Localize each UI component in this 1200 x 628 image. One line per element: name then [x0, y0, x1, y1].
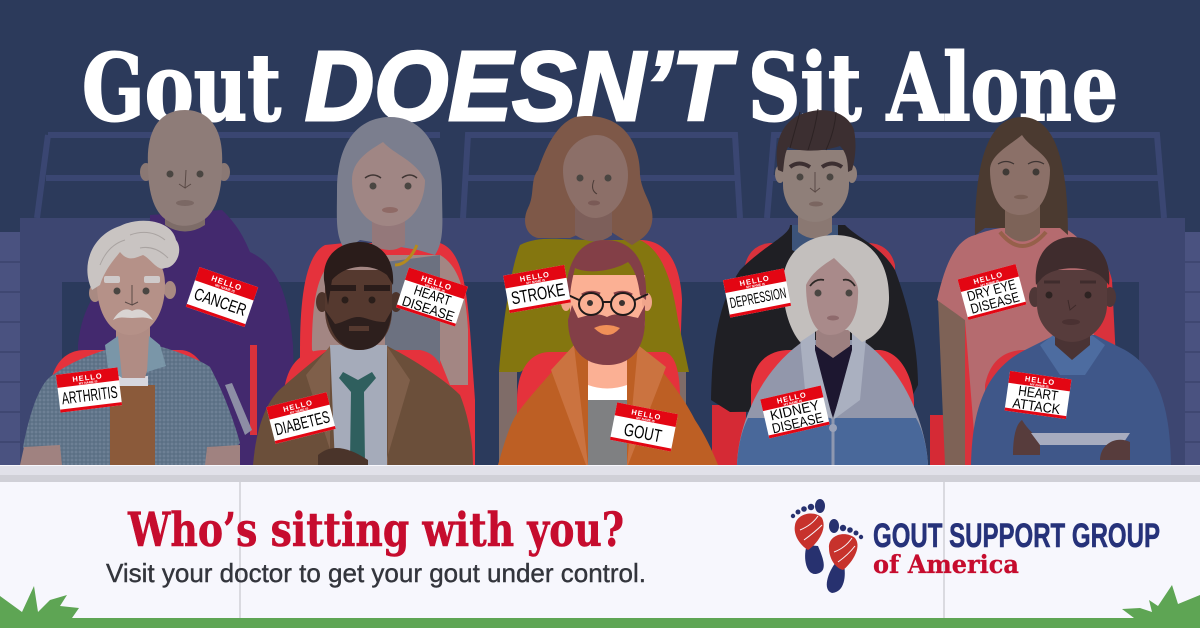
person: man in blue sweater holding paper	[971, 237, 1171, 465]
name tag: cancer	[186, 267, 258, 327]
name tag: diabetes: MY NAME IS	[290, 406, 309, 415]
name tag: stroke: MY NAME IS	[526, 278, 545, 285]
name tag: dry eye disease: DISEASE	[969, 288, 1021, 317]
callout heading: Who’s sitting with you?	[127, 503, 624, 558]
title: DOESN’T	[305, 31, 737, 141]
name tag: depression: DEPRESSION	[728, 285, 788, 312]
person: bald man in purple hoodie	[78, 110, 295, 465]
name tag: gout: MY NAME IS	[636, 416, 655, 423]
name tag: dry eye disease	[958, 264, 1026, 320]
title	[82, 31, 1118, 142]
name tag: heart disease: HELLO	[420, 274, 453, 292]
name tag: stroke	[503, 265, 571, 313]
name tag: kidney disease: MY NAME IS	[783, 399, 803, 407]
logo subtitle: of America	[873, 550, 1019, 579]
name tag: gout	[610, 402, 678, 452]
person: blonde older woman in hooded jacket	[737, 235, 928, 465]
icon: left plant	[0, 586, 79, 618]
name tag: heart attack: HELLO	[1024, 374, 1056, 387]
name tag: diabetes	[266, 392, 336, 444]
name tag: depression: MY NAME IS	[746, 282, 765, 289]
person: woman with long hair in pink top	[930, 117, 1120, 465]
name tag: arthritis: MY NAME IS	[78, 379, 98, 386]
logo: Gout Support Group of America	[791, 499, 1160, 593]
name tag: heart disease	[396, 267, 468, 327]
name tag: heart disease: HEART	[412, 282, 453, 309]
seat: fourth front red chair	[751, 350, 914, 465]
name tag: kidney disease	[760, 386, 830, 438]
person: gout man with glasses and orange jacket	[498, 240, 718, 465]
name tag: depression	[723, 268, 791, 318]
name tag: heart attack: MY NAME IS	[1030, 382, 1049, 389]
name tag: kidney disease: DISEASE	[770, 409, 825, 436]
theatre background: seat rows	[0, 135, 1200, 466]
name tag: stroke: HELLO	[519, 270, 551, 284]
name tag: arthritis	[56, 367, 122, 413]
person: grey haired woman	[300, 117, 475, 465]
person: woman with curly hair in olive top	[499, 116, 689, 465]
icon: right foot	[827, 519, 863, 593]
icon: left foot	[791, 499, 825, 574]
name tag: kidney disease: KIDNEY	[768, 396, 821, 423]
seat: front left red chair	[50, 350, 212, 465]
name tag: heart disease: MY NAME IS	[424, 283, 446, 294]
bottom panel	[0, 465, 1200, 618]
name tag: heart attack	[1005, 371, 1071, 419]
seat: second front red chair	[283, 350, 445, 465]
person: man with beard in brown jacket	[253, 242, 473, 465]
name tag: arthritis: HELLO	[72, 371, 103, 384]
name tag: cancer: MY NAME IS	[214, 283, 236, 294]
name tag: stroke: STROKE	[510, 279, 566, 308]
name tag: arthritis: ARTHRITIS	[61, 383, 119, 408]
name tag: dry eye disease: DRY EYE	[965, 276, 1018, 304]
name tag: heart disease: DISEASE	[400, 292, 456, 324]
name tag: cancer: HELLO	[210, 274, 243, 293]
name tag: dry eye disease: MY NAME IS	[980, 279, 999, 288]
name tag: dry eye disease: HELLO	[972, 270, 1004, 286]
name tag: depression: HELLO	[739, 273, 770, 288]
seat: fifth front red chair	[985, 350, 1141, 465]
person: old man with white curly hair and plaid shirt	[20, 221, 240, 465]
person: dark haired man in black jacket	[711, 109, 918, 465]
name tag: diabetes: HELLO	[282, 398, 314, 414]
callout text: Visit your doctor to get your gout under control.	[106, 558, 646, 588]
name tag: gout: HELLO	[631, 407, 662, 422]
title: Gout	[82, 33, 281, 142]
name tag: heart attack: HEART	[1017, 382, 1060, 404]
name tag: gout: GOUT	[622, 419, 663, 446]
ground strip	[0, 618, 1200, 628]
icon: right plant	[1122, 585, 1200, 618]
name tag: heart attack: ATTACK	[1012, 395, 1062, 417]
name tag: diabetes: DIABETES	[273, 407, 332, 439]
name tag: kidney disease: HELLO	[776, 390, 808, 406]
name tag: cancer: CANCER	[192, 284, 249, 320]
seat: center front red chair	[517, 352, 680, 465]
